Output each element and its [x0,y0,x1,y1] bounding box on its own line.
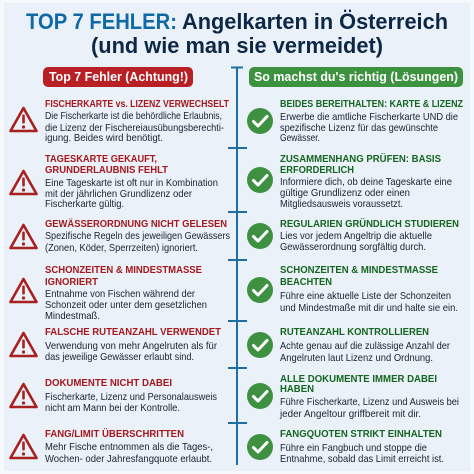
solution 2 [247,152,452,210]
solution 7: Entnahme, sobald das Limit erreicht ist. [280,453,444,465]
solution 2: Informiere dich, ob deine Tageskarte eine [280,176,452,188]
mistake 4: Entnahme von Fischen während der [45,288,195,300]
heading: Fehler: Top 7 Fehler (Achtung!) [49,69,188,84]
mistake 5: FALSCHE RUTEANZAHL VERWENDET [45,327,222,338]
solution 6: ALLE DOKUMENTE IMMER DABEI [280,374,437,385]
mistake 2 [10,154,218,210]
solution 6: jeder Angeltour griffbereit mit dir. [279,408,421,420]
solution 4 [247,265,458,314]
mistake 3 [10,217,230,254]
mistake 1: igung. Beides wird benötigt. [45,132,163,144]
mistake 4: Mindestmaß. [45,310,100,322]
solution 5 [247,327,450,364]
solution 3 [247,217,459,253]
solution 7 [247,429,444,465]
panel: solutions [247,99,464,465]
mistake 6: nicht am Mann bei der Kontrolle. [45,402,180,414]
mistake 4: SCHONZEITEN & MINDESTMASSE [45,265,202,276]
mistake 5: das jeweilige Gewässer erlaubt sind. [45,351,194,363]
center divider [228,67,247,465]
solution 5: RUTEANZAHL KONTROLLIEREN [280,327,429,338]
solution 2: Mitgliedsausweis voraussetzt. [280,198,403,210]
mistake 5: Verwendung von mehr Angelruten als für [45,340,217,352]
mistake 2: TAGESKARTE GEKAUFT, [45,154,157,165]
mistake 1: die Lizenz der Fischereiausübungsberechti- [45,122,224,134]
mistake 1: Die Fischerkarte ist die behördliche Erlaubnis, [45,110,222,122]
mistake 7: Mehr Fische entnommen als die Tages-, [45,441,213,453]
mistake 1 [10,99,230,144]
mistake 6 [10,378,217,414]
solution 1: Gewässer. [280,132,320,144]
panel: mistakes [10,99,230,465]
solution 4: BEACHTEN [280,277,332,288]
solution 5: Achte genau auf die zulässige Anzahl der [280,340,450,352]
mistake 6: Fischerkarte, Lizenz und Personalausweis [45,391,217,403]
solution 4: und Mindestmaße mit dir und halte sie ein. [280,302,458,314]
mistake 2: Eine Tageskarte ist oft nur in Kombination [45,177,218,189]
mistake 4 [10,265,207,322]
title: TOP 7 FEHLER: [26,9,177,34]
title: Angelkarten in Österreich [182,9,448,34]
solution 1: spezifische Lizenz für das gewünschte [280,122,438,134]
solution 2: ERFORDERLICH [280,165,354,176]
mistake 3: (Zonen, Köder, Sperrzeiten) ignoriert. [45,242,198,254]
mistake 2: mit der jährlichen Grundlizenz oder [45,188,192,200]
mistake 6: DOKUMENTE NICHT DABEI [45,378,172,389]
solution 4: Führe eine aktuelle Liste der Schonzeiten [280,290,451,302]
mistake 2: GRUNDERLAUBNIS FEHLT [45,165,169,176]
solution 2: gültige Grundlizenz oder einen [280,187,410,199]
heading: Lösungen: So machst du's richtig (Lösungen) [254,69,458,84]
solution 6 [247,374,459,420]
mistake 4: Schonzeit oder unter dem gesetzlichen [45,299,207,311]
mistake 3: Spezifische Regeln des jeweiligen Gewässers [45,230,230,242]
solution 7: FANGQUOTEN STRIKT EINHALTEN [280,429,442,440]
title: (und wie man sie vermeidet) [91,33,383,58]
mistake 7: FANG/LIMIT ÜBERSCHRITTEN [45,427,184,440]
solution 5: Angelruten laut Lizenz und Ordnung. [280,352,433,364]
solution 3: REGULARIEN GRÜNDLICH STUDIEREN [280,217,459,230]
mistake 5 [10,327,222,363]
solution 2: ZUSAMMENHANG PRÜFEN: BASIS [280,152,441,165]
mistake 3: GEWÄSSERORDNUNG NICHT GELESEN [45,217,227,230]
solution 1 [247,99,464,144]
mistake 2: Fischerkarte gültig. [45,198,124,210]
title [26,9,448,58]
solution 6: HABEN [280,384,314,395]
mistake 7 [10,427,213,465]
solution 3: Lies vor jedem Angeltrip die aktuelle [280,230,432,242]
mistake 7: Wochen- oder Jahresfangquote erlaubt. [45,453,212,465]
solution 4: SCHONZEITEN & MINDESTMASSE [280,265,438,276]
solution 7: Führe ein Fangbuch und stoppe die [280,442,427,454]
solution 3: Gewässerordnung sorgfältig durch. [280,241,426,253]
mistake 1: FISCHERKARTE vs. LIZENZ VERWECHSELT [45,99,230,110]
mistake 4: IGNORIERT [45,277,99,288]
